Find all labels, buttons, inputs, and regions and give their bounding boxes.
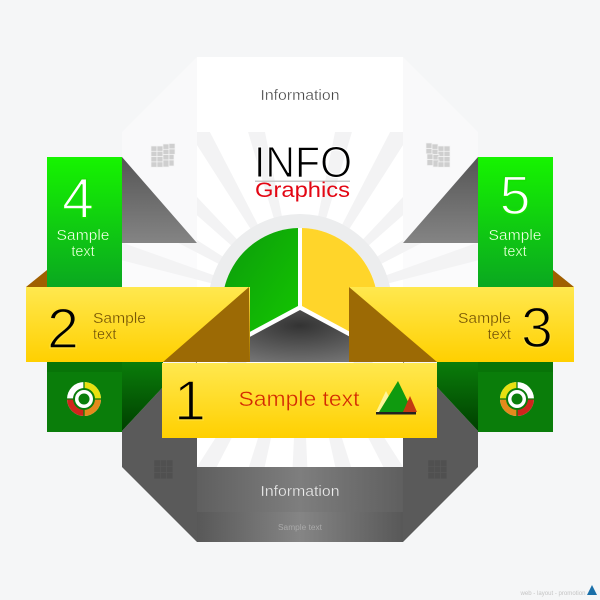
panel: 5: 5	[500, 164, 530, 226]
top information label: Information	[260, 87, 340, 104]
grey triangle right	[403, 157, 478, 243]
grey triangle left	[122, 157, 197, 243]
panel: 3	[349, 287, 574, 362]
panel: 5: text	[503, 244, 527, 260]
panel: 2	[26, 287, 250, 362]
icon: donut left	[67, 382, 101, 416]
sunburst rays	[126, 132, 510, 467]
dark green fold left	[122, 362, 163, 431]
panel: 5	[478, 157, 574, 287]
icon: mosaic top left	[151, 144, 175, 167]
panel: 2: Sample	[93, 311, 146, 327]
panel: 3: text	[488, 327, 511, 343]
title: INFO Graphics: INFO	[254, 138, 352, 187]
panel: green icon box right	[478, 362, 553, 432]
panel: 3: 3	[521, 296, 553, 360]
panel: 4: Sample	[56, 228, 110, 244]
panel: 3: Sample	[458, 311, 511, 327]
icon: mountains	[376, 381, 417, 414]
pie chart	[222, 228, 378, 384]
panel: top white octagon	[122, 57, 478, 467]
panel: 2: 2	[47, 297, 79, 361]
panel: 5: Sample	[488, 228, 542, 244]
icon: donut right	[500, 382, 534, 416]
panel: 1: Sample text	[238, 388, 360, 411]
lower information label: Information	[260, 483, 340, 500]
dark green fold right	[437, 362, 478, 431]
icon: mosaic bottom right	[428, 460, 447, 479]
icon: mosaic bottom left	[154, 460, 173, 479]
lower sample text: Sample text	[278, 523, 323, 532]
panel: 2: text	[93, 327, 116, 343]
icon: footer logo	[587, 585, 597, 595]
icon: mosaic top right	[426, 143, 450, 167]
panel: 1: 1	[174, 369, 206, 433]
panel: 1	[162, 363, 437, 438]
pie ring	[208, 214, 392, 398]
title: INFO Graphics: Graphics	[255, 179, 350, 202]
footer credit: web - layout - promotion	[519, 591, 586, 597]
lower grey frame	[122, 362, 478, 542]
panel: green icon box left	[47, 362, 122, 432]
panel: 4: 4	[62, 167, 94, 231]
panel: 4: text	[71, 244, 95, 260]
panel: 4	[26, 157, 122, 287]
